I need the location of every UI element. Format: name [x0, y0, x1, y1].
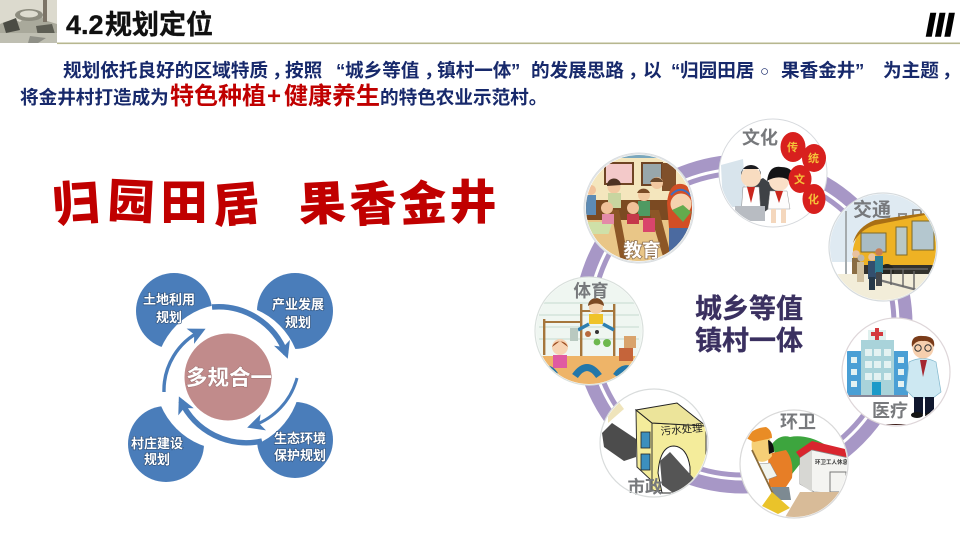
- intro paragraph: 将金井村打造成为: [20, 87, 169, 108]
- header photo: ink sketch of a stone well: [0, 0, 57, 43]
- center caption: [695, 293, 803, 356]
- node labels: 村庄建设: [131, 436, 183, 451]
- white ring backdrop: [155, 304, 301, 450]
- label: 文化: [742, 127, 778, 148]
- intro paragraph: 按照: [285, 60, 322, 81]
- node labels: 产业发展: [272, 297, 324, 312]
- intro paragraph: ”: [855, 60, 864, 81]
- center caption: 城乡等值: [695, 293, 803, 324]
- intro paragraph: 规划依托良好的区域特质: [63, 60, 268, 81]
- label: 环卫: [780, 412, 816, 432]
- intro paragraph: ，: [424, 60, 443, 81]
- intro paragraph: +: [267, 83, 281, 110]
- intro paragraph: ”: [511, 60, 520, 81]
- node labels: 规划: [156, 310, 182, 325]
- service circle: 教育: [583, 153, 694, 265]
- node labels: 土地利用: [143, 292, 195, 307]
- calligraphy slogan: 归: [50, 163, 102, 236]
- service circle: 市政: [600, 389, 708, 498]
- label: 体育: [574, 281, 608, 301]
- intro paragraph: ，: [628, 60, 647, 81]
- service circle: 交通: [828, 192, 943, 304]
- calligraphy slogan: 金: [398, 164, 448, 235]
- node: 土地利用规划: [136, 273, 212, 349]
- intro paragraph: 以: [643, 60, 662, 81]
- label: 市政: [628, 477, 663, 497]
- node: 村庄建设规划: [128, 406, 204, 482]
- service circle: 环卫: [740, 410, 854, 519]
- intro paragraph: 镇村一体: [437, 60, 512, 81]
- title: 4.2: [66, 10, 104, 40]
- intro paragraph: 的发展思路: [531, 60, 624, 81]
- cycle arrows: [164, 307, 297, 443]
- service circle: 文化: [719, 119, 827, 227]
- service circle: 医疗: [842, 318, 950, 427]
- lanterns: 文: [794, 172, 805, 186]
- node labels: 生态环境: [274, 431, 326, 446]
- node labels: [131, 292, 326, 467]
- double ring connecting services: [580, 161, 906, 487]
- service circle: 体育: [534, 276, 644, 386]
- service circle: 环卫: 环卫工人休息室: [815, 458, 854, 466]
- center circle: [184, 334, 272, 420]
- calligraphy slogan: 园: [106, 162, 157, 233]
- section marker: III: [926, 7, 955, 43]
- label: 教育: [623, 240, 661, 261]
- calligraphy slogan: 居: [209, 164, 262, 237]
- header rule: [57, 42, 960, 44]
- calligraphy slogan: 果: [297, 164, 347, 235]
- label: 交通: [853, 198, 891, 221]
- intro paragraph: “: [671, 60, 680, 81]
- center circle: 多规合一: [186, 366, 272, 390]
- intro paragraph: 城乡等值: [345, 60, 419, 81]
- intro paragraph: 的特色农业示范村。: [380, 87, 547, 108]
- intro paragraph: [20, 60, 960, 110]
- lanterns: 化: [808, 192, 819, 206]
- intro paragraph: 归园田居: [680, 60, 754, 81]
- node labels: 保护规划: [274, 448, 326, 463]
- diagram: 多规合一: [128, 273, 333, 482]
- node: 产业发展规划: [257, 273, 333, 349]
- calligraphy slogan: 香: [348, 165, 398, 236]
- node: 生态环境保护规划: [257, 402, 333, 478]
- label: 医疗: [872, 400, 908, 421]
- center caption: 镇村一体: [695, 326, 803, 356]
- intro paragraph: 果香金井: [781, 60, 855, 81]
- intro paragraph: 健康养生: [284, 83, 380, 110]
- node labels: 规划: [144, 452, 170, 467]
- lanterns: [780, 132, 826, 214]
- calligraphy slogan: [50, 162, 496, 237]
- intro paragraph: 特色种植: [170, 83, 266, 110]
- intro paragraph: 为主题: [883, 60, 939, 81]
- lanterns: 传: [787, 140, 798, 154]
- calligraphy slogan: 井: [450, 164, 496, 233]
- title: 规划定位: [105, 9, 213, 40]
- calligraphy slogan: 田: [160, 164, 208, 233]
- lanterns: 统: [808, 151, 819, 165]
- intro paragraph: ，: [272, 60, 291, 81]
- intro paragraph: ○: [760, 63, 769, 80]
- intro paragraph: “: [336, 60, 345, 81]
- node labels: 规划: [285, 315, 311, 330]
- service circle: 市政: 污水处理: [660, 422, 704, 438]
